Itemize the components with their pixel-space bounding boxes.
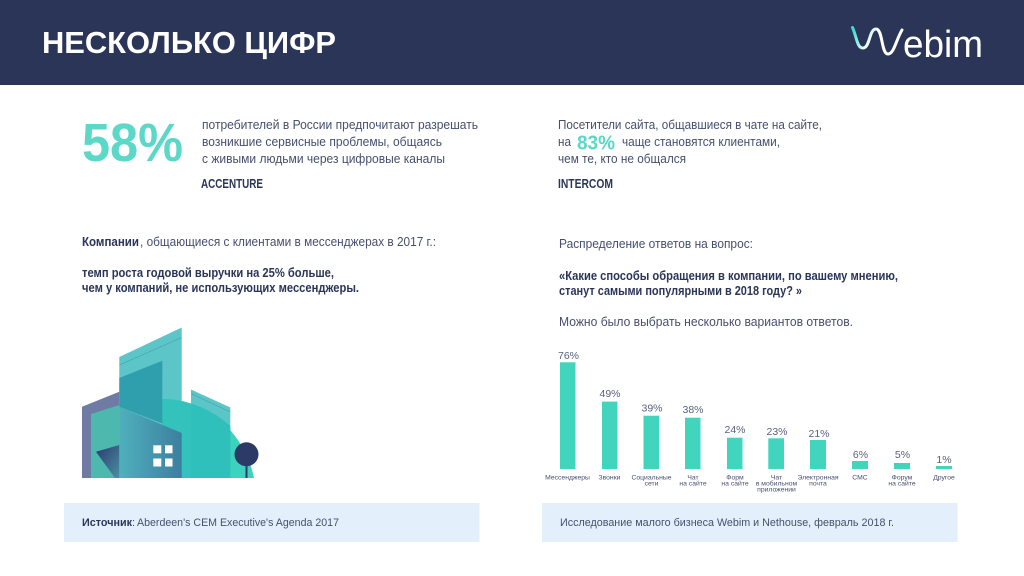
stat description: с живыми людьми через цифровые каналы: [202, 152, 445, 166]
bar: calls: Звонки: [599, 474, 621, 482]
footer panel: source Aberdeen: :: [132, 517, 135, 529]
header bar: [0, 0, 1024, 85]
text block: survey question: Можно было выбрать несколько вариантов ответов.: [559, 315, 853, 329]
tree: [234, 442, 258, 478]
text block: companies: [82, 235, 436, 295]
bar: email: 21%: [808, 428, 830, 440]
bar: other: [933, 454, 955, 482]
title: НЕСКОЛЬКО ЦИФР: [42, 25, 336, 60]
bar: site forms: 24%: [724, 424, 746, 436]
bar: site forum: 5%: [895, 449, 910, 461]
stat description with 83%: 83%: [577, 132, 615, 154]
stat description with 83%: чаще становятся клиентами,: [622, 135, 780, 149]
footer panel: source Webim study: Исследование малого бизнеса Webim и Nethouse, февраль 2018 г.: [560, 517, 894, 529]
text block: companies: чем у компаний, не использующих мессенджеры.: [82, 281, 359, 295]
stat description with 83%: чем те, кто не общался: [558, 152, 686, 166]
logo: Webim: [852, 24, 983, 66]
bar: messengers: [545, 350, 590, 482]
footer panel: source Aberdeen: Источник: [82, 517, 132, 529]
bar: social networks: Социальные: [631, 474, 672, 482]
big number 58%: 58%: [82, 113, 183, 173]
logo: Webim: ebim: [903, 24, 983, 66]
bar chart: survey answers: [545, 350, 955, 494]
stat block: 83 percent: [558, 118, 822, 191]
bar: email: [797, 428, 839, 488]
text block: survey question: Распределение ответов на вопрос:: [559, 237, 753, 251]
bar: social networks: [631, 402, 672, 488]
bar: app chat: 23%: [766, 426, 788, 438]
bar: messengers: 76%: [558, 350, 579, 362]
source: Intercom: INTERCOM: [558, 177, 613, 191]
text block: companies: темп роста годовой выручки на 25% больше,: [82, 266, 334, 280]
bar: site forum: на сайте: [888, 480, 916, 488]
windows: [153, 445, 172, 466]
bar: other: Другое: [933, 474, 955, 482]
bar: site chat: [679, 404, 707, 488]
bar: site chat: Чат: [687, 474, 699, 482]
bar: site forms: [721, 424, 749, 488]
stat block: 58 percent: [82, 113, 478, 191]
bar: site forum: [888, 449, 916, 488]
bar: site forms: на сайте: [721, 480, 749, 488]
bar: email: Электронная: [797, 474, 839, 482]
bar: other: 1%: [936, 454, 952, 466]
text block: survey question: «Какие способы обращения в компании, по вашему мнению,: [559, 269, 898, 283]
stat description with 83%: [558, 118, 822, 166]
stat description: [202, 118, 478, 166]
bar: email: почта: [809, 480, 827, 488]
bar: app chat: приложении: [757, 486, 796, 494]
illustration: buildings: [82, 328, 258, 478]
bar: sms: СМС: [852, 474, 868, 482]
bar: calls: 49%: [599, 388, 621, 400]
text block: companies: Компании: [82, 235, 139, 249]
bar: sms: 6%: [853, 449, 868, 461]
bar: site forms: Форм: [726, 474, 744, 482]
text block: companies: , общающиеся с клиентами в мессенджерах в 2017 г.:: [140, 235, 436, 249]
footer panel: source Aberdeen: [64, 503, 480, 542]
bar: app chat: Чат: [771, 474, 782, 482]
bar: site chat: 38%: [682, 404, 704, 416]
text block: survey question: [559, 237, 898, 329]
stat description: потребителей в России предпочитают разрешать: [202, 118, 478, 132]
bar: site chat: на сайте: [679, 480, 707, 488]
bar: social networks: сети: [645, 480, 659, 488]
bar: social networks: 39%: [641, 402, 663, 414]
text block: survey question: станут самыми популярными в 2018 году? »: [559, 284, 802, 298]
bar: calls: [599, 388, 621, 482]
stat description with 83%: Посетители сайта, общавшиеся в чате на сайте,: [558, 118, 822, 132]
bar: app chat: [756, 426, 798, 494]
footer panel: source Aberdeen: Aberdeen's CEM Executive's Agenda 2017: [137, 517, 339, 529]
bar: messengers: Мессенджеры: [545, 474, 590, 482]
stat description: возникшие сервисные проблемы, общаясь: [202, 135, 442, 149]
footer panel: source Webim study: [542, 503, 958, 542]
stat description with 83%: на: [558, 135, 571, 149]
bar: site forum: Форум: [892, 474, 913, 482]
bar: sms: [852, 449, 868, 482]
bar: app chat: в мобильном: [756, 480, 798, 488]
source: Accenture: ACCENTURE: [201, 177, 263, 191]
